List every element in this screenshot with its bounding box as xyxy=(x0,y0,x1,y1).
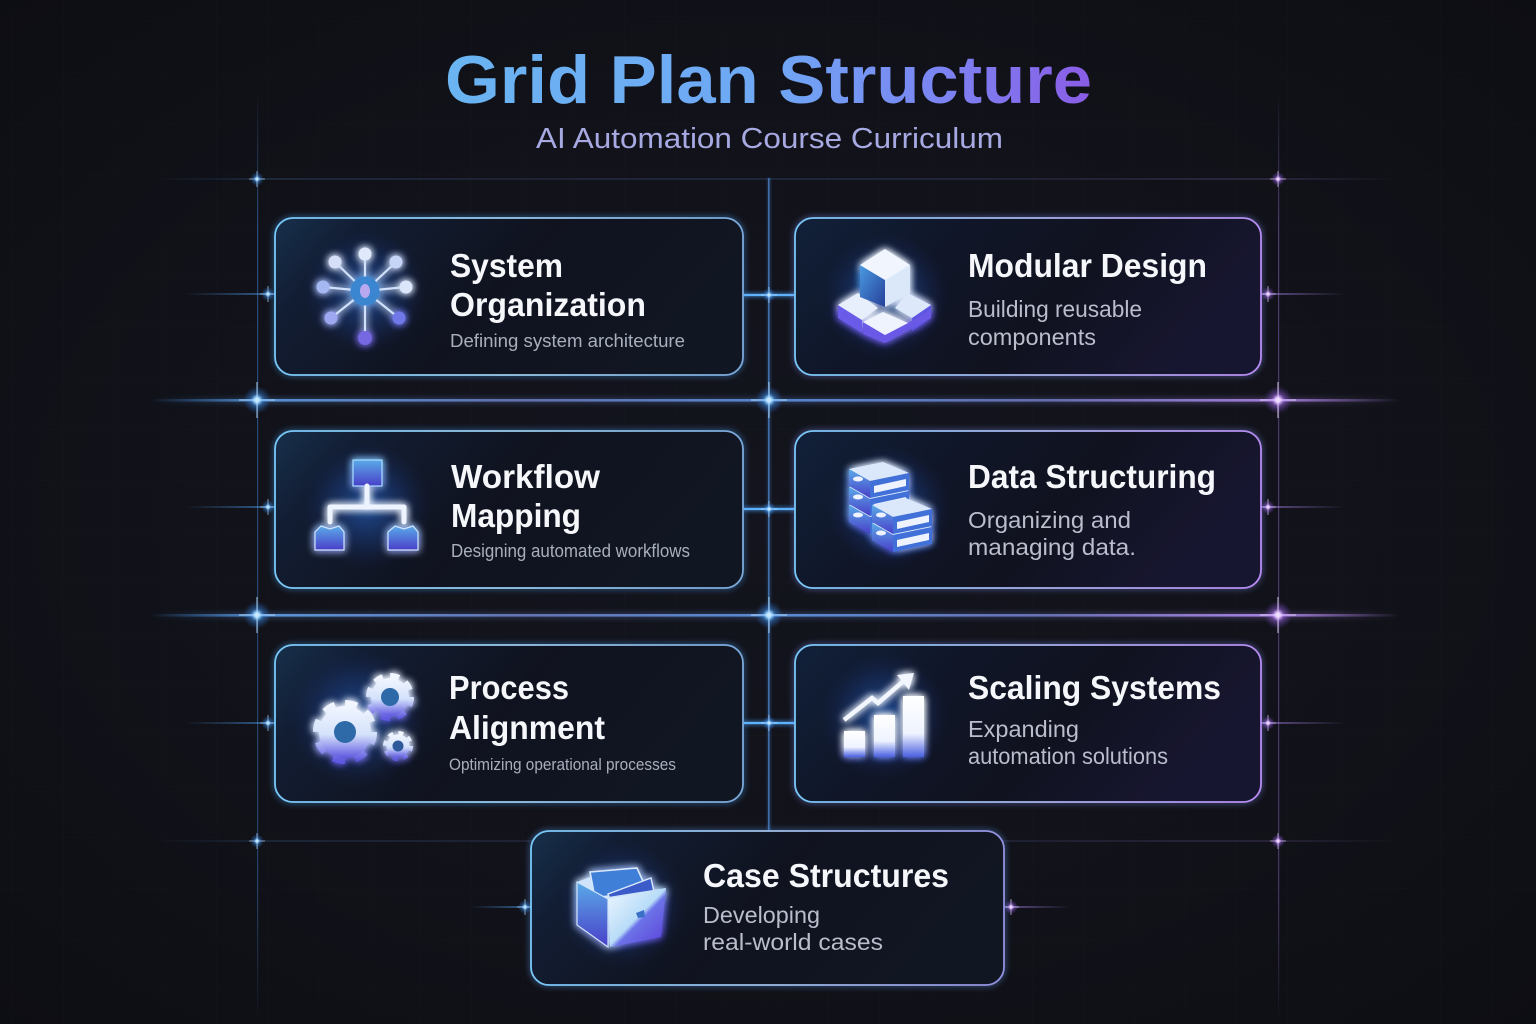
description xyxy=(703,902,883,955)
description: Designing automated workflows xyxy=(451,541,690,561)
panel: Case Structures xyxy=(531,831,1004,985)
icon: case folder box xyxy=(558,841,686,969)
heading: Data Structuring: Data Structuring xyxy=(968,458,1216,495)
card connectors xyxy=(185,286,1345,915)
icon: workflow tree xyxy=(303,442,431,570)
heading: Process Alignment xyxy=(449,669,605,746)
heading: Modular Design: Modular Design xyxy=(968,247,1207,284)
heading: System Organization: System xyxy=(450,247,563,284)
heading: Process Alignment: Process xyxy=(449,669,569,706)
description: Building reusable xyxy=(968,296,1142,322)
heading: Case Structures: Case Structures xyxy=(703,857,949,894)
icon: growth chart xyxy=(820,652,948,780)
description: Expanding xyxy=(968,716,1079,742)
description xyxy=(968,296,1142,350)
panel: Workflow Mapping xyxy=(275,431,743,588)
icon: network hub xyxy=(303,229,427,353)
description: Defining system architecture xyxy=(450,331,685,351)
heading: Workflow Mapping xyxy=(451,458,600,534)
description: managing data. xyxy=(968,534,1136,560)
icon: modular blocks xyxy=(821,232,949,360)
heading: Scaling Systems: Scaling Systems xyxy=(968,669,1221,706)
panel: Scaling Systems xyxy=(795,645,1261,802)
description: components xyxy=(968,324,1096,350)
panel: Process Alignment xyxy=(275,645,743,802)
description xyxy=(968,716,1168,769)
icon: gears xyxy=(288,648,428,788)
title: Grid Plan Structure xyxy=(445,42,1092,118)
heading: Workflow Mapping: Workflow xyxy=(451,458,600,495)
panel: System Organization xyxy=(275,218,743,375)
description: automation solutions xyxy=(968,743,1168,769)
panel: Data Structuring xyxy=(795,431,1261,588)
heading: Process Alignment: Alignment xyxy=(449,709,605,746)
subtitle: AI Automation Course Curriculum xyxy=(536,123,1003,155)
panel: Modular Design xyxy=(795,218,1261,375)
heading: System Organization: Organization xyxy=(450,286,646,323)
heading: Workflow Mapping: Mapping xyxy=(451,497,581,534)
description: Optimizing operational processes xyxy=(449,756,676,774)
description xyxy=(968,507,1136,560)
description: Developing xyxy=(703,902,820,928)
icon: data stacks xyxy=(827,446,951,570)
description: Organizing and xyxy=(968,507,1131,533)
grid lines and glowing nodes xyxy=(150,90,1400,1024)
description: real-world cases xyxy=(703,929,883,955)
heading: System Organization xyxy=(450,247,646,323)
